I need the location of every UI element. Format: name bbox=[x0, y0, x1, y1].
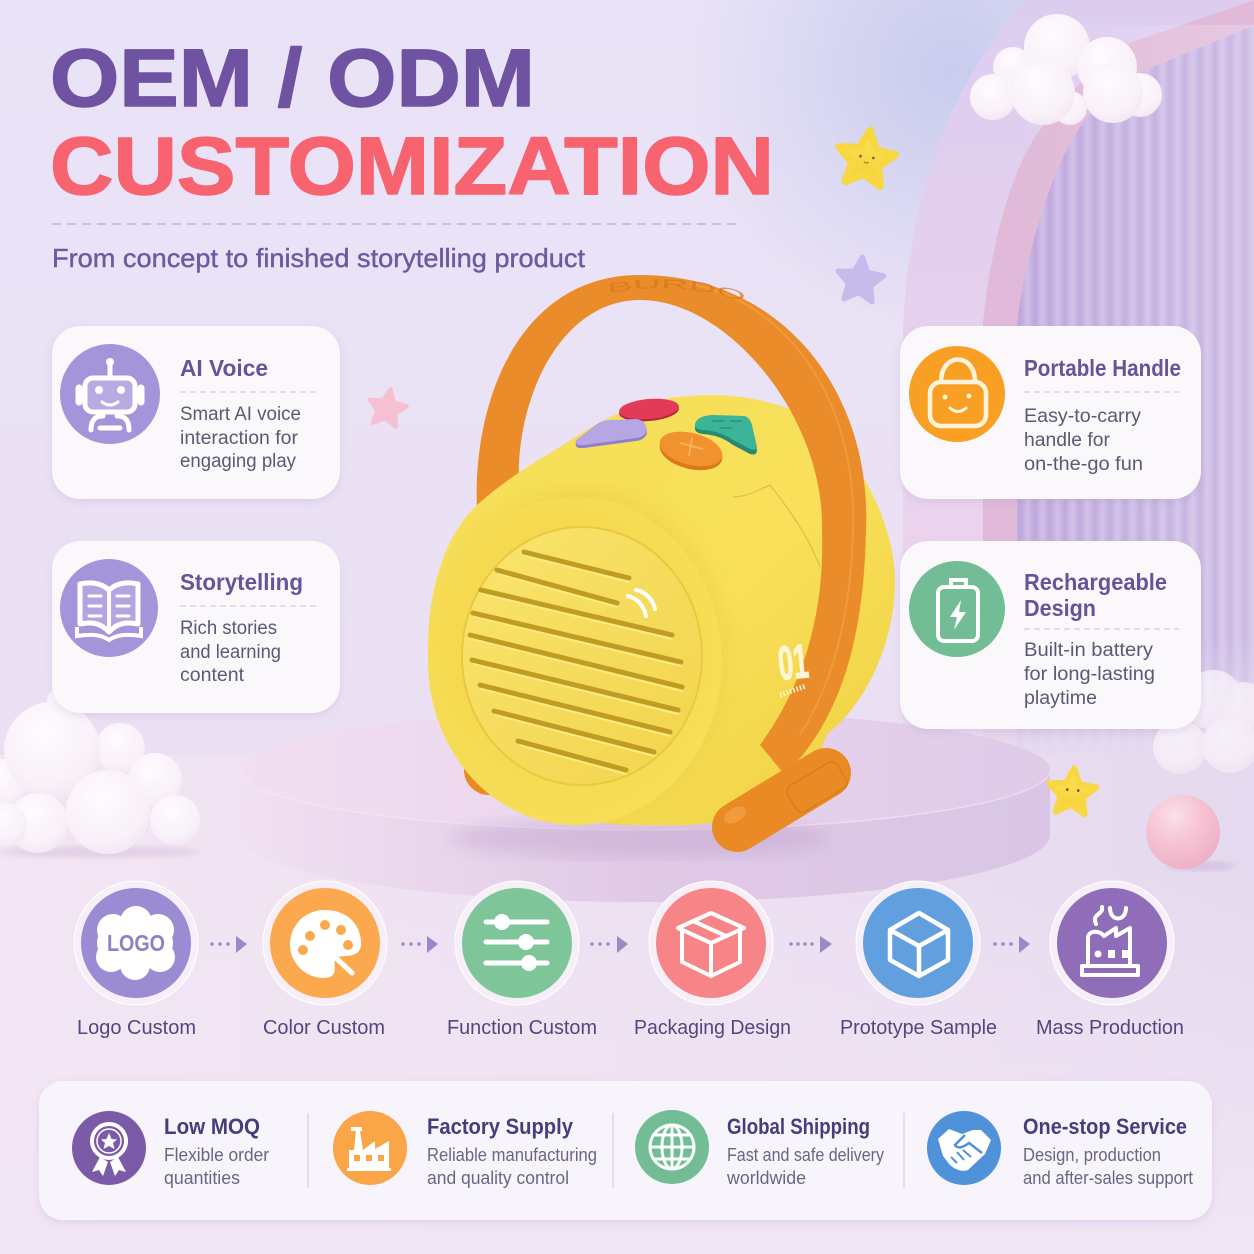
heading bbox=[1024, 569, 1167, 621]
icon: battery bbox=[909, 561, 1005, 657]
benefit: One-stop Service bbox=[927, 1111, 1193, 1188]
icon: book bbox=[60, 559, 158, 657]
number mark: 01 bbox=[776, 635, 811, 691]
process flow bbox=[74, 881, 1184, 1039]
description bbox=[180, 618, 281, 686]
description: Easy-to-carry bbox=[1024, 406, 1142, 427]
pink ball bbox=[1146, 795, 1235, 871]
arch backdrop bbox=[903, 0, 1254, 760]
toy left foot bbox=[464, 745, 514, 795]
star: yellow large bbox=[834, 126, 898, 188]
benefit: Global Shipping: Global Shipping bbox=[727, 1114, 870, 1139]
buttons bbox=[576, 396, 757, 476]
toy front rim bbox=[428, 497, 722, 825]
step: Mass Production: Mass Production bbox=[1036, 1017, 1184, 1039]
toy body bbox=[428, 395, 895, 825]
heading: Design bbox=[1024, 595, 1096, 621]
toy handle back bbox=[477, 275, 640, 510]
description: playtime bbox=[1024, 688, 1097, 709]
benefit: Factory Supply bbox=[333, 1111, 597, 1188]
description: handle for bbox=[1024, 430, 1111, 451]
title bbox=[50, 33, 774, 212]
benefit: Factory Supply: and quality control bbox=[427, 1168, 569, 1188]
star: pink bbox=[365, 386, 409, 428]
benefit: Low MOQ: Low MOQ bbox=[164, 1114, 260, 1139]
benefit: Low MOQ: quantities bbox=[164, 1168, 240, 1188]
subtitle: From concept to finished storytelling product bbox=[52, 243, 586, 273]
panel: benefits bbox=[39, 1081, 1212, 1220]
heading: AI Voice bbox=[180, 355, 268, 381]
toy rim shadow and seam bbox=[733, 484, 820, 567]
step: Mass Production bbox=[1036, 881, 1184, 1039]
description: Smart AI voice bbox=[180, 404, 301, 425]
arrow bbox=[401, 936, 438, 953]
arrow bbox=[590, 936, 628, 953]
cloud left bbox=[0, 690, 200, 858]
step: Logo Custom: Logo Custom bbox=[77, 1017, 196, 1039]
description: engaging play bbox=[180, 451, 296, 472]
description bbox=[1024, 640, 1155, 709]
floor bbox=[0, 755, 1254, 1254]
benefit: One-stop Service: and after-sales support bbox=[1023, 1168, 1193, 1188]
heading: Rechargeable bbox=[1024, 569, 1167, 595]
brand text on handle: BURDO bbox=[610, 280, 744, 299]
benefit: One-stop Service: One-stop Service bbox=[1023, 1114, 1187, 1139]
toy right foot bbox=[721, 759, 850, 827]
cloud right bbox=[1153, 670, 1254, 774]
description: content bbox=[180, 665, 245, 686]
description: interaction for bbox=[180, 428, 299, 449]
title: CUSTOMIZATION bbox=[50, 121, 774, 212]
heading: Portable Handle bbox=[1024, 355, 1181, 381]
heading: Storytelling bbox=[180, 569, 303, 595]
arrow bbox=[993, 936, 1030, 953]
description: Rich stories bbox=[180, 618, 277, 639]
benefit: One-stop Service: Design, production bbox=[1023, 1145, 1161, 1165]
step: Packaging Design bbox=[634, 881, 791, 1039]
benefit: Low MOQ bbox=[72, 1111, 269, 1188]
step: Color Custom bbox=[263, 881, 387, 1039]
description: on-the-go fun bbox=[1024, 454, 1143, 475]
star: purple bbox=[835, 255, 885, 303]
arrow bbox=[789, 936, 832, 953]
step: Function Custom bbox=[447, 881, 597, 1039]
description: for long-lasting bbox=[1024, 664, 1155, 685]
benefit: Global Shipping: worldwide bbox=[726, 1168, 806, 1188]
star: yellow small bbox=[1047, 766, 1098, 815]
benefit: Factory Supply: Factory Supply bbox=[427, 1114, 574, 1139]
benefit: Factory Supply: Reliable manufacturing bbox=[427, 1145, 597, 1165]
description: and learning bbox=[180, 642, 281, 663]
arrow bbox=[210, 936, 247, 953]
title: OEM / ODM bbox=[50, 33, 535, 124]
step: Function Custom: Function Custom bbox=[447, 1017, 597, 1039]
step: Color Custom: Color Custom bbox=[263, 1017, 385, 1039]
benefit: Global Shipping: Fast and safe delivery bbox=[727, 1145, 884, 1165]
description: Built-in battery bbox=[1024, 640, 1154, 661]
toy handle front bbox=[640, 275, 866, 775]
benefit: Global Shipping bbox=[635, 1110, 884, 1188]
podium bbox=[240, 710, 1050, 902]
step: Packaging Design: Packaging Design bbox=[634, 1017, 791, 1039]
card: Storytelling bbox=[52, 541, 340, 713]
product: storytelling speaker toy bbox=[428, 275, 895, 858]
step: Logo Custom bbox=[74, 881, 198, 1039]
step: Prototype Sample bbox=[840, 881, 997, 1039]
description bbox=[1024, 406, 1143, 475]
step: Prototype Sample: Prototype Sample bbox=[840, 1017, 997, 1039]
benefit: Low MOQ: Flexible order bbox=[164, 1145, 269, 1165]
description bbox=[180, 404, 301, 472]
card: AI Voice bbox=[52, 326, 340, 499]
speaker grill bbox=[462, 527, 702, 785]
card: Rechargeable Design bbox=[900, 541, 1201, 729]
icon: robot bbox=[60, 344, 160, 444]
icon: bag bbox=[909, 346, 1005, 442]
cloud top right bbox=[970, 14, 1162, 125]
step: Logo Custom: LOGO bbox=[107, 930, 165, 956]
card: Portable Handle bbox=[900, 326, 1201, 499]
